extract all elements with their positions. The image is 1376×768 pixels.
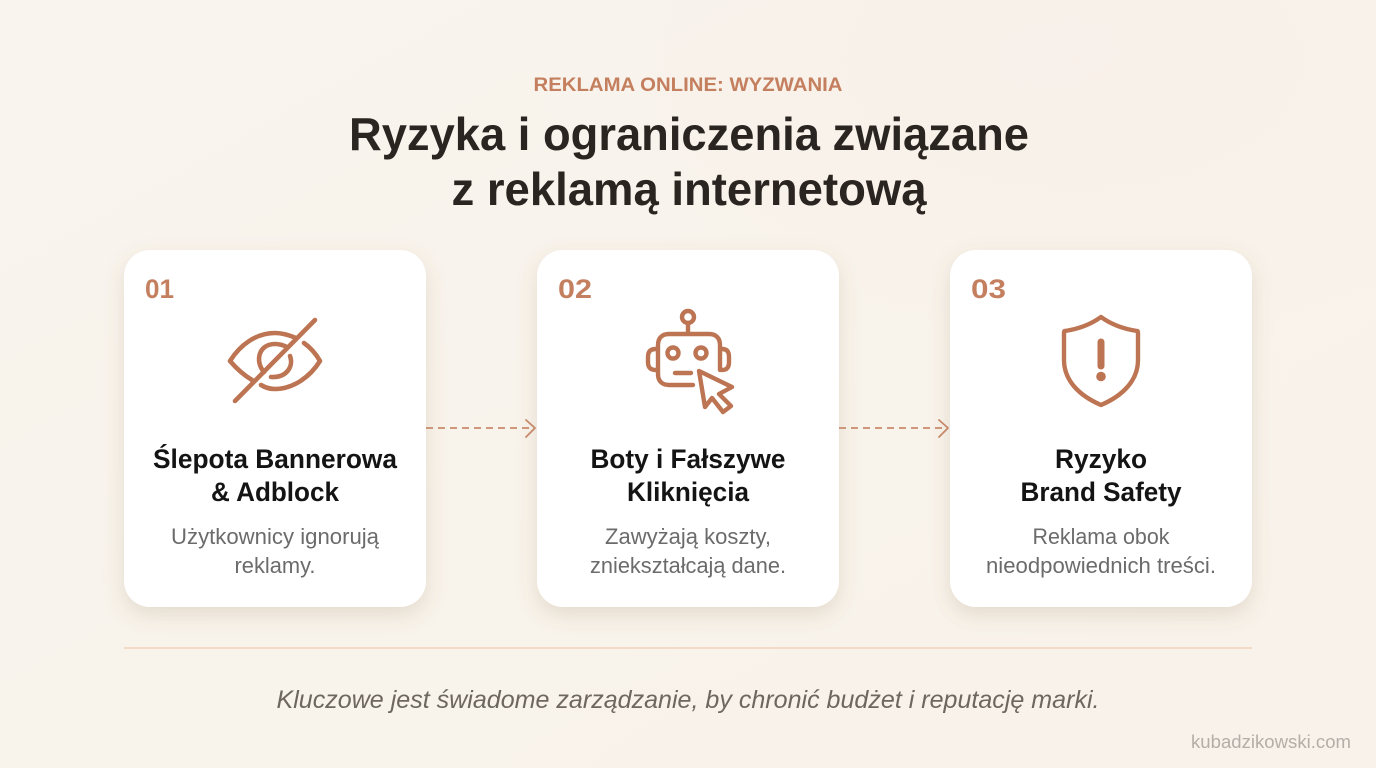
title <box>349 108 1029 215</box>
card description <box>171 524 380 578</box>
eyebrow label: REKLAMA ONLINE: WYZWANIA <box>534 74 842 96</box>
card description: Reklama obok <box>1032 524 1170 549</box>
number 02: 02 <box>558 274 592 304</box>
arrow: card 1 to card 2 <box>426 420 535 437</box>
card heading: Ślepota Bannerowa <box>153 443 398 474</box>
card heading: Kliknięcia <box>627 477 750 507</box>
card description <box>986 524 1216 578</box>
card heading: Brand Safety <box>1020 477 1182 507</box>
icon: robot with cursor <box>648 311 732 412</box>
card heading: Boty i Fałszywe <box>590 444 786 474</box>
card description: Użytkownicy ignorują <box>171 524 380 549</box>
card heading <box>1020 444 1182 507</box>
card heading: Ryzyko <box>1055 444 1147 474</box>
card description: Zawyżają koszty, <box>605 524 771 549</box>
card heading <box>590 444 786 507</box>
panel: card 3 <box>950 250 1252 607</box>
card heading <box>153 443 398 507</box>
number 03: 03 <box>971 274 1006 304</box>
card description: reklamy. <box>234 553 316 578</box>
title: Ryzyka i ograniczenia związane <box>349 108 1029 160</box>
icon: shield with exclamation mark <box>1064 317 1138 405</box>
icon: crossed-out eye <box>230 320 320 401</box>
card description <box>590 524 786 578</box>
card description: zniekształcają dane. <box>590 553 786 578</box>
card heading: & Adblock <box>211 477 340 507</box>
title: z reklamą internetową <box>452 163 927 215</box>
number 01: 01 <box>145 274 174 304</box>
watermark: kubadzikowski.com <box>1191 732 1351 752</box>
closing statement: Kluczowe jest świadome zarządzanie, by chronić budżet i reputację marki. <box>276 686 1100 714</box>
panel: card 1 <box>124 250 426 607</box>
card description: nieodpowiednich treści. <box>986 553 1216 578</box>
panel: card 2 <box>537 250 839 607</box>
arrow: card 2 to card 3 <box>839 420 948 437</box>
